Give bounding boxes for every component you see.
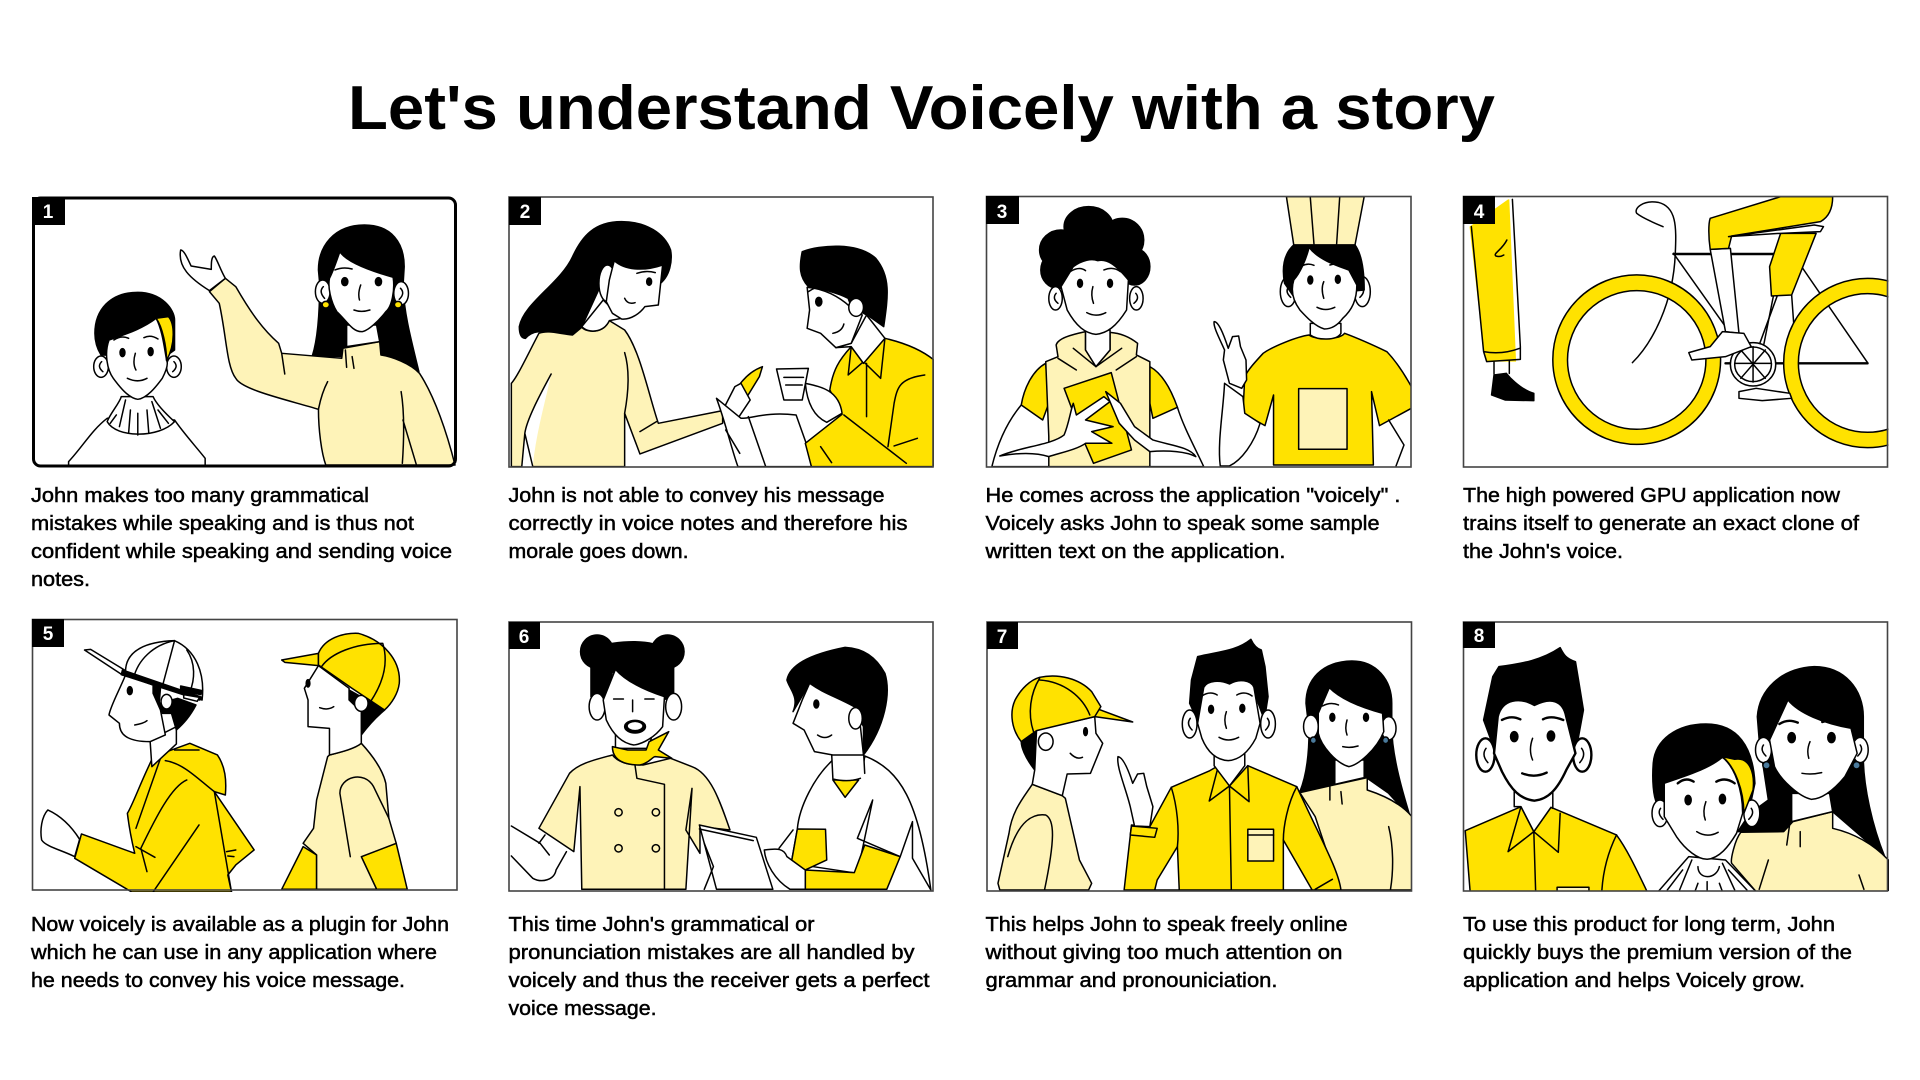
curly man's ears [1049,287,1143,310]
man's hair [1484,648,1583,753]
woman's hair [1738,667,1885,857]
illustration 2: woman reading as man holds cup [511,222,934,467]
caption 6: This time John's grammatical or [508,914,815,936]
boy's hair [95,292,175,357]
paper sheet [717,398,814,467]
yellow streak [1722,757,1753,813]
man's ears [1476,738,1591,772]
caption 2: correctly in voice notes and therefore his [508,513,908,535]
chef's hair [1283,245,1364,297]
panel 8: premium version [1463,622,1888,992]
badge 3 [986,196,1019,224]
saddle [1729,225,1823,237]
front wheel [1553,275,1721,444]
chef's face [603,669,664,745]
curly man's features [1070,268,1120,315]
pointing hand [1214,322,1247,388]
chain wheel [1730,343,1776,386]
woman's face [329,252,394,332]
chef's ears [589,693,682,720]
chef's shirt [1243,333,1411,465]
caption 5 [30,914,449,992]
collar stripes [1667,860,1747,892]
chef's neck [615,733,652,748]
woman's hair [312,225,419,372]
capped person's face [1032,717,1103,796]
note-taker's ear [849,708,862,729]
yellow neckerchief [612,732,672,765]
yellow sleeves [1021,363,1177,420]
caption 7: This helps John to speak freely online [986,914,1348,936]
woman's neck [1792,793,1833,822]
caption 3: Voicely asks John to speak some sample [986,513,1380,535]
right arm line [1389,420,1404,466]
chef's ears [1280,277,1370,307]
shirt gap right [1283,840,1312,890]
white fingers [723,383,750,418]
boy's ears [1652,800,1760,827]
panel 7 border [987,622,1412,891]
chef's face [1292,247,1357,329]
front shin [1710,248,1739,333]
man's shirt [1465,807,1647,892]
man's face [1494,700,1575,801]
left man's hand [41,810,80,857]
sleeve arc [340,777,389,857]
frame lines [1673,253,1868,363]
capped person's ear [1038,733,1053,750]
illustration 6: chef talking to note-taker [511,635,931,890]
left man's features [127,687,147,725]
woman's torso [1731,812,1888,892]
badge 5: 5 [43,624,54,645]
badge 1 [32,197,65,225]
scarf folds [1058,348,1136,370]
woman's top lines [1330,787,1393,889]
woman's neck [1335,760,1364,784]
woman's features [1779,721,1843,774]
panel 4 border [1464,196,1888,467]
yellow fingers [740,366,764,396]
caption 1: notes. [31,569,90,591]
note-taker's hair [787,647,887,755]
badge 4: 4 [1474,202,1485,223]
arm lines [522,353,656,467]
woman's face [1770,700,1857,799]
right person's t-shirt [303,743,396,889]
caption 4: trains itself to generate an exact clone of [1463,513,1859,535]
badge 7: 7 [997,627,1007,648]
torso lines [1759,823,1864,889]
badge 5 [32,619,64,647]
woman's ears and earrings [315,280,408,308]
yellow thigh [1709,197,1833,249]
man's neck [1514,790,1553,832]
title: Let's understand Voicely with a story [348,74,1496,143]
panel 3 border [986,196,1411,467]
note-taker's face [793,683,863,755]
raised cuff [1130,826,1157,837]
caption 7 [984,914,1348,992]
right person's neck and face [304,666,361,755]
caption 8: To use this product for long term, John [1463,914,1835,936]
illustration 1: woman gesturing beside boy [69,225,455,467]
chef jacket [539,755,730,889]
caption 6 [508,914,930,1020]
ankle [1494,361,1509,374]
caption 1: John makes too many grammatical [31,485,369,507]
man's ears [1182,710,1275,738]
woman's neck [347,325,380,347]
boy's yellow hair streak [156,317,173,361]
capped person's hair [1021,732,1037,770]
chef's neck [1310,323,1341,339]
chef's hat [1286,197,1364,245]
panel 5: Voicely plugin [30,619,457,992]
caption 1: mistakes while speaking and is thus not [31,513,414,535]
cap brim [85,649,202,700]
left man's hoodie [75,743,254,892]
boy's striped collar [1658,857,1756,892]
note-taker's yellow neck patch [833,780,859,797]
panel 7: speak freely [984,622,1412,992]
caption 3: He comes across the application "voicely" . [986,485,1400,507]
caption 7: without giving too much attention on [984,942,1342,964]
caption 1: confident while speaking and sending voice [31,541,452,563]
man's shirt [1124,766,1341,890]
note-taker's features [814,700,832,737]
caption 8 [1463,914,1852,992]
badge 8: 8 [1474,626,1484,647]
chef's features [614,699,654,733]
chef's arm [1219,383,1260,466]
standing leg [1470,199,1520,362]
chest panel [1299,389,1347,449]
woman's ears and earrings [1304,715,1396,744]
woman's pale blouse [209,278,455,465]
illustration 3: curly man and chef [992,197,1411,467]
white cap [126,641,203,700]
woman's face [1318,688,1384,767]
handlebar [1632,202,1676,363]
caption 6: pronunciation mistakes are all handled by [508,942,914,964]
man's neck [1214,747,1245,786]
paper fold [726,417,766,466]
caption 8: quickly buys the premium version of the [1463,942,1852,964]
caption 5: he needs to convey his voice message. [31,970,405,992]
caption 6: voicely and thus the receiver gets a perfect [508,970,930,992]
panel 1: John makes mistakes [31,197,456,591]
caption 2 [508,485,908,563]
boy's features [114,336,158,381]
rear wheel [1784,278,1920,448]
panel 3: John finds Voicely [984,196,1411,563]
cap strap [181,686,202,701]
badge 2 [509,197,541,225]
capped person's features [1070,728,1087,758]
man's face [807,287,862,348]
man's hair [1190,639,1268,723]
hoodie lines [136,750,236,892]
sleeve arc [1008,815,1052,890]
note-taker's t-shirt [791,756,931,890]
caption 6: voice message. [508,998,656,1020]
blouse details [282,350,416,465]
man's features [808,286,844,333]
caption 4: the John's voice. [1463,541,1623,563]
panel 5 border [32,620,457,890]
caption 7: grammar and pronouniciation. [986,970,1278,992]
panel 6: mistakes handled [508,622,933,1020]
note-taker's hand and pen [764,830,805,889]
yellow cap [282,633,399,710]
caption 4: The high powered GPU application now [1463,485,1841,507]
jacket buttons [615,809,660,852]
woman's raised hand [180,250,225,291]
chef's features [1302,264,1345,309]
back yellow leg [1770,233,1816,296]
panel 6 border [509,622,933,891]
illustration 7: capped person, man and woman [998,639,1412,890]
right person's hair [349,690,385,735]
right person's features [306,680,334,709]
collar ribs [110,400,168,435]
panel 1 border [34,198,456,466]
panel 8 border [1464,622,1888,891]
boy's features [1678,780,1735,835]
badge 3: 3 [997,202,1007,223]
woman's ear [599,266,612,302]
neck [1086,330,1110,367]
curly man's white arms [992,363,1204,467]
neck outline [832,750,865,781]
man's shirt [805,338,934,467]
shirt lines [1171,766,1332,889]
shirt lines [821,338,925,463]
boy's face [107,318,167,399]
frame tubes [1673,254,1868,363]
caption 5: which he can use in any application where [30,942,437,964]
illustration 4: bicycle and legs [1470,197,1920,448]
boy's body [69,418,205,467]
clasped hands [1000,392,1196,457]
woman's torso [1300,778,1412,890]
man's hand [805,383,842,422]
badge 1: 1 [43,202,54,223]
rear cycling shoe [1739,388,1792,401]
man's hair [800,246,887,327]
badge 6 [509,622,540,649]
woman's pale top [511,321,723,467]
shirt lines [1508,807,1616,892]
woman's hair [519,222,671,338]
woman's ears and earrings [1756,737,1868,769]
man's neck [836,315,885,363]
man's face [1198,681,1260,761]
illustration 5: two people in caps [41,633,407,892]
man's features [1502,717,1563,776]
pointing hand [1118,757,1153,827]
clipboard [699,825,773,889]
left man's hair [132,680,196,730]
left man's face [109,675,165,742]
panel 2: John's morale goes down [508,197,934,563]
capped person's t-shirt [998,784,1092,890]
black shoe [1492,373,1534,401]
badge 8 [1463,622,1495,648]
woman's face [606,261,663,319]
curly man's face [1061,260,1128,334]
coffee cup [777,368,808,400]
note-taker's yellow arms [791,829,900,889]
caption 3: written text on the application. [984,541,1286,563]
front cycling shoe [1689,332,1751,360]
man's features [1202,693,1252,740]
woman's features [625,271,655,303]
caption 3 [984,485,1400,563]
panel 4: GPU training on bicycle [1463,196,1920,563]
back shin [1756,295,1798,383]
woman's features [1323,704,1375,747]
boy's ribbed collar [107,397,175,434]
note-taker's neck [832,750,865,780]
jacket placket [635,766,664,889]
left arm [511,826,566,881]
caption 2: morale goes down. [508,541,688,563]
boy's ears [94,356,181,377]
chef's hair [591,642,674,700]
caption 8: application and helps Voicely grow. [1463,970,1805,992]
pale scarf [1046,332,1150,467]
yellow book [1064,373,1131,463]
badge 6: 6 [519,627,529,648]
badge 7 [987,622,1018,649]
caption 4 [1463,485,1859,563]
left man's neck [150,727,176,767]
right person's ear [355,695,368,711]
chef's hair buns [581,635,684,668]
boy's hair [1653,724,1755,807]
panel 2 border [509,197,933,467]
left man's ear [161,694,172,709]
shirt gaps [1155,847,1179,890]
right person's arms [282,843,407,889]
woman's neck [582,300,622,331]
yellow cap [1012,676,1133,742]
caption 2: John is not able to convey his message [508,485,884,507]
caption 1 [31,485,452,591]
caption 5: Now voicely is available as a plugin for John [31,914,449,936]
illustration 8: three characters together [1465,648,1888,892]
shirt pocket top [1557,887,1589,892]
curly hair [1040,207,1150,288]
badge 2: 2 [520,202,530,223]
woman's hair [1300,661,1410,817]
shirt pocket [1248,829,1274,861]
boy's face [1664,757,1743,859]
gap beside arm [522,374,551,467]
man's ear [849,298,863,316]
badge 4 [1463,196,1495,224]
woman's features [335,268,387,311]
